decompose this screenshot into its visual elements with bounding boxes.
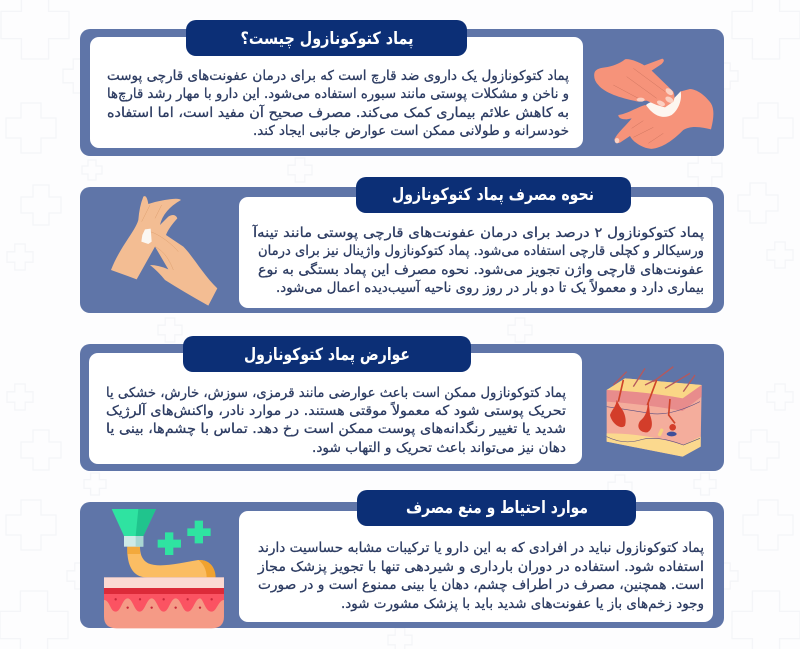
body text: شدید یا تغییر رنگدانه‌های پوست ممکن است رخ دهد. تماس با چشم‌ها، بینی یا <box>106 420 566 437</box>
body text: است. همچنین، مصرف در اطراف چشم، دهان یا بینی ممنوع است و در صورت <box>258 577 704 593</box>
body text: پماد کتوکونازول ممکن است باعث عوارضی مانند قرمزی، سوزش، خارش، خشکی یا <box>106 385 566 401</box>
heading pill <box>186 20 467 56</box>
body text: به کاهش علائم بیماری کمک می‌کند. مصرف صحیح آن مفید است، اما استفاده <box>107 104 569 121</box>
body text: پماد کتوکونازول ۲ درصد برای درمان عفونت‌های قارچی پوستی مانند تینه‌آ <box>252 224 704 241</box>
text card <box>239 511 713 622</box>
heading pill: پماد کتوکونازول چیست؟ <box>240 29 414 49</box>
body text: وجود زخم‌های باز یا عفونت‌های شدید باید با پزشک مشورت شود. <box>341 596 704 612</box>
icon: ointment tube over skin <box>104 509 224 628</box>
panel: how to use <box>80 177 724 313</box>
heading pill <box>183 336 471 372</box>
body text: دهان نیز می‌تواند باعث تحریک و التهاب شود. <box>312 440 566 456</box>
body text <box>257 540 704 612</box>
body text <box>106 385 566 456</box>
body text: پماد کتوکونازول نباید در افرادی که به این دارو یا ترکیبات مشابه حساسیت دارند <box>258 540 704 556</box>
heading pill: نحوه مصرف پماد کتوکونازول <box>392 185 594 205</box>
body text: پماد کتوکونازول یک داروی ضد قارچ است که برای درمان عفونت‌های قارچی پوست <box>107 68 569 84</box>
panel: what is ketoconazole ointment <box>80 20 724 156</box>
panel: side effects <box>80 336 724 471</box>
panel: precautions and contraindications <box>80 490 724 628</box>
text card <box>89 353 582 464</box>
body text: ورسیکالر و کچلی قارچی استفاده می‌شود. پماد کتوکونازول واژینال نیز برای درمان <box>258 243 704 259</box>
text card <box>90 37 583 148</box>
heading pill <box>357 490 636 526</box>
icon: cream on back of hand <box>111 196 217 306</box>
body text: استفاده شود. استفاده در دوران بارداری و شیردهی تنها با تجویز پزشک مجاز <box>257 559 704 575</box>
body text <box>252 224 704 296</box>
icon: skin cross-section <box>607 367 702 457</box>
heading pill: عوارض پماد کتوکونازول <box>244 345 410 365</box>
heading pill <box>356 177 631 213</box>
body text: خودسرانه و طولانی ممکن است عوارض جانبی ایجاد کند. <box>253 123 569 139</box>
body text: عفونت‌های قارچی واژن تجویز می‌شود. نحوه مصرف این پماد بستگی به نوع <box>258 261 704 278</box>
heading pill: موارد احتیاط و منع مصرف <box>406 498 588 518</box>
body text: تحریک پوستی شود که معمولاً موقتی هستند. در موارد نادر، واکنش‌های آلرژیک <box>106 401 566 419</box>
icon: hands applying cream <box>594 59 713 149</box>
body text: بیماری دارد و معمولاً یک تا دو بار در روز روی ناحیه آسیب‌دیده اعمال می‌شود. <box>276 278 704 296</box>
text card <box>239 197 713 308</box>
body text <box>107 68 569 139</box>
body text: و ناخن و مشکلات پوستی مانند سبوره استفاده می‌شود. این دارو با مهار رشد قارچ‌ها <box>107 86 569 102</box>
